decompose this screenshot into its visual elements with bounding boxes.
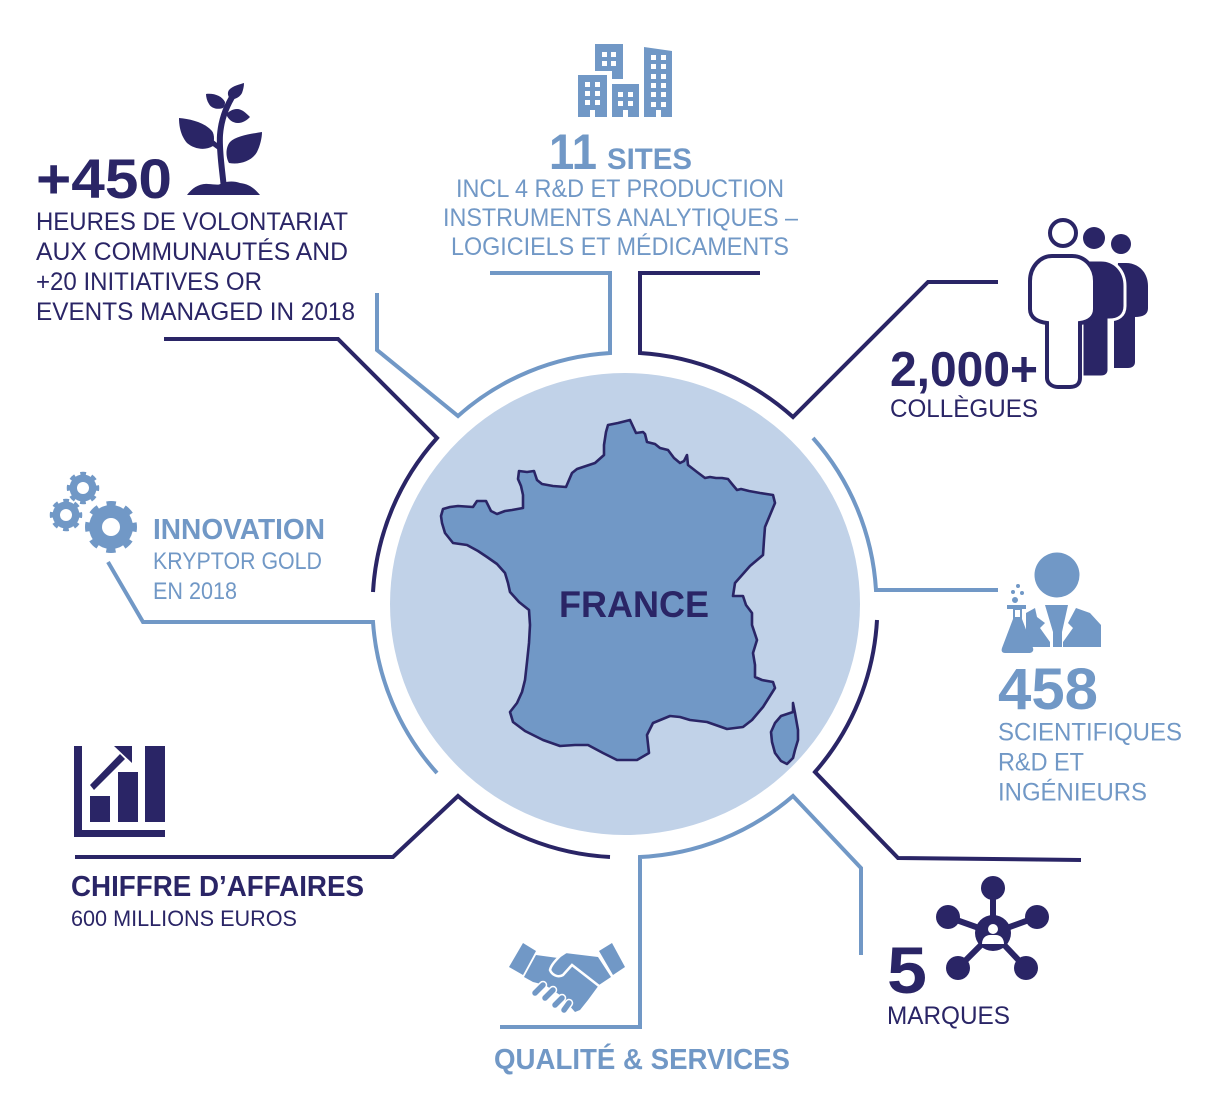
- text: scientists description: R&D ET: [998, 748, 1084, 776]
- icon: buildings: [578, 44, 672, 117]
- text: brands label: MARQUES: [887, 1002, 1010, 1030]
- text: innovation description: EN 2018: [153, 578, 237, 605]
- connector: volunteering: [164, 339, 437, 592]
- block: sites: SITES: [607, 143, 692, 176]
- heading: quality and services: QUALITÉ & SERVICES: [494, 1042, 790, 1076]
- icon: brand network: [936, 876, 1049, 980]
- text: colleagues label: COLLÈGUES: [890, 394, 1038, 423]
- text: sites description: INCL 4 R&D ET PRODUCTION: [456, 175, 784, 203]
- number: 11 sites: 11: [549, 124, 597, 180]
- text: volunteering description: EVENTS MANAGED IN 2018: [36, 298, 355, 326]
- number: 458: 458: [998, 657, 1098, 722]
- text: innovation description: [153, 548, 322, 605]
- connector: sites left: [377, 273, 610, 416]
- block: brands: [887, 933, 1010, 1030]
- block: sites: [443, 124, 798, 261]
- number: +450: +450: [36, 147, 172, 210]
- central circle: [390, 373, 860, 835]
- text: volunteering description: [36, 208, 355, 326]
- text: innovation description: KRYPTOR GOLD: [153, 548, 322, 575]
- connector: brands navy: [815, 620, 1081, 860]
- block: colleagues: [890, 343, 1038, 423]
- text: scientists description: INGÉNIEURS: [998, 778, 1147, 806]
- icon: plant: [179, 83, 262, 195]
- map label: France: FRANCE: [559, 584, 709, 625]
- connector: innovation: [108, 562, 437, 773]
- text: volunteering description: +20 INITIATIVES OR: [36, 268, 262, 296]
- text: sites description: LOGICIELS ET MÉDICAMENTS: [451, 232, 789, 261]
- icon: bar chart: [74, 746, 165, 837]
- icon: gears: [52, 474, 134, 550]
- icon: people: [1030, 220, 1148, 387]
- text: sites description: [443, 175, 798, 261]
- number: 2,000+: 2,000+: [890, 343, 1038, 397]
- number: 5: 5: [887, 933, 927, 1007]
- text: scientists description: SCIENTIFIQUES: [998, 718, 1182, 746]
- block: volunteering: [36, 147, 355, 326]
- heading: revenue: CHIFFRE D’AFFAIRES: [71, 871, 364, 903]
- text: volunteering description: HEURES DE VOLONTARIAT: [36, 208, 348, 236]
- connector: scientists: [813, 438, 998, 590]
- block: revenue: [71, 871, 364, 931]
- connector: revenue: [75, 796, 610, 857]
- map of France: [441, 420, 798, 764]
- icon: handshake: [509, 943, 625, 1012]
- heading: innovation: INNOVATION: [153, 514, 325, 546]
- connector: quality: [500, 796, 861, 1027]
- connector: colleagues: [640, 273, 998, 417]
- block: innovation: [153, 514, 325, 605]
- text: scientists description: [998, 718, 1182, 806]
- text: sites description: INSTRUMENTS ANALYTIQUES –: [443, 204, 798, 232]
- text: volunteering description: AUX COMMUNAUTÉS AND: [36, 237, 348, 266]
- text: revenue amount: 600 MILLIONS EUROS: [71, 906, 297, 931]
- icon: scientist: [1002, 552, 1101, 653]
- block: scientists: [998, 657, 1182, 806]
